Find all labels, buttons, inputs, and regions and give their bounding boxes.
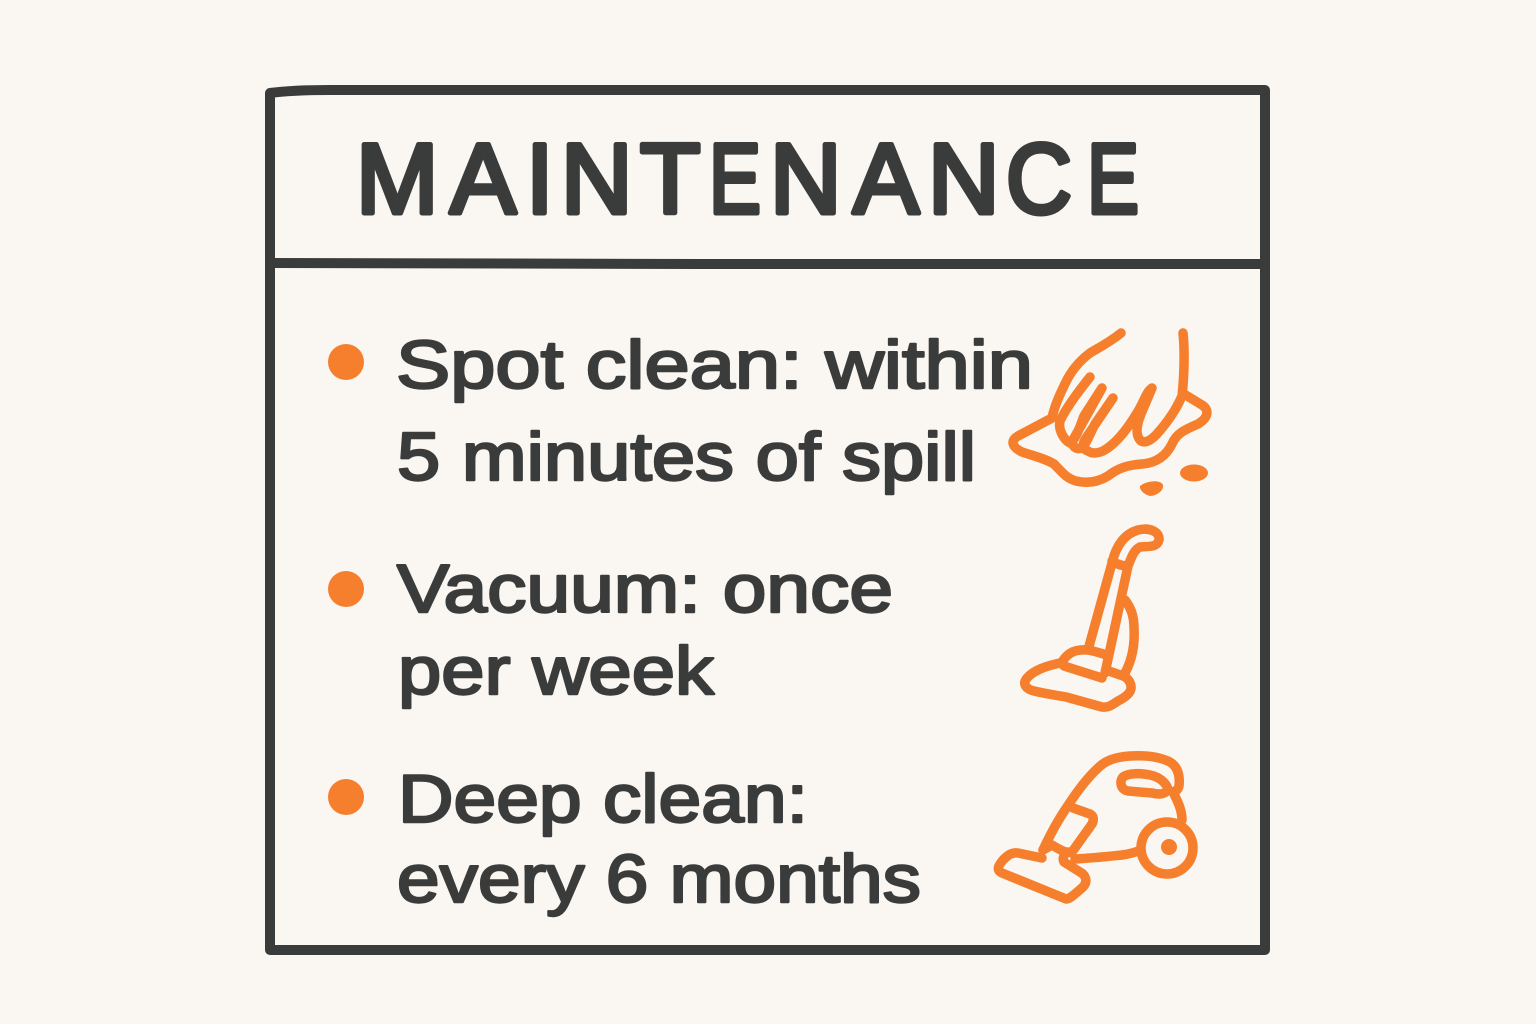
title: N — [561, 123, 632, 234]
title: E — [1087, 123, 1139, 234]
title: E — [709, 123, 761, 234]
icon: upright vacuum — [1025, 529, 1159, 707]
panel: maintenance card frame — [270, 90, 1265, 950]
title: M — [356, 123, 438, 234]
list item: vacuum — [328, 529, 1159, 709]
bullet: deep clean — [328, 779, 364, 815]
title: A — [450, 123, 516, 234]
icon: canister vacuum — [998, 756, 1193, 899]
bullet: spot clean — [328, 344, 364, 380]
title: T — [640, 123, 700, 234]
text: vacuum: Vacuum: once — [397, 551, 893, 627]
list item: deep clean — [328, 756, 1193, 917]
title: I — [526, 123, 554, 234]
title: N — [770, 123, 842, 234]
text: deep clean: Deep clean: — [398, 761, 808, 837]
text: vacuum frequency: per week — [398, 633, 715, 709]
text: spot clean: Spot clean: within — [396, 327, 1033, 403]
title: N — [928, 123, 1000, 234]
text: spot clean timing: 5 minutes of spill — [397, 419, 976, 495]
bullet: vacuum — [328, 571, 364, 607]
text: deep clean frequency: every 6 months — [397, 841, 921, 917]
icon: spill droplets — [1140, 464, 1208, 496]
list item: spot clean — [328, 327, 1208, 496]
title: A — [853, 123, 919, 234]
icon: hand wiping spill — [1013, 333, 1207, 482]
title: C — [1006, 123, 1072, 234]
